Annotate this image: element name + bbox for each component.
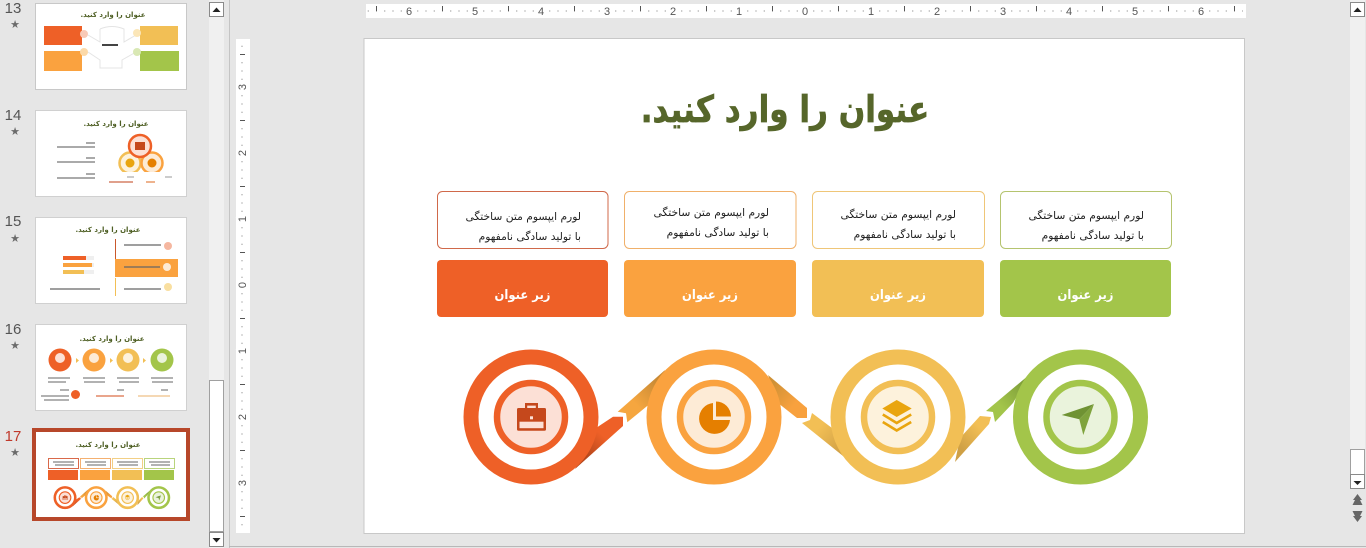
- left ruler: 1: [237, 348, 249, 354]
- top ruler: 4: [1066, 6, 1072, 18]
- thumbnail: slide 16: عنوان را وارد کنید.: [79, 335, 145, 343]
- top ruler: [366, 4, 1246, 18]
- text box 1: لورم ایپسوم متن ساختگی: [465, 210, 581, 223]
- thumbnail: slide 16: ★: [10, 339, 20, 352]
- top ruler: 1: [736, 6, 742, 18]
- arrow: green incoming ribbon: [986, 375, 1029, 422]
- right scrollbar: [1350, 0, 1365, 522]
- text box 1: با تولید سادگی نامفهوم: [479, 230, 581, 243]
- column 1: red: [437, 192, 608, 317]
- arrow: yellow incoming ribbon: [802, 413, 848, 460]
- text box 3: لورم ایپسوم متن ساختگی: [840, 208, 956, 221]
- subheading block 1: زیر عنوان: [495, 287, 550, 302]
- text box 2: لورم ایپسوم متن ساختگی: [653, 206, 769, 219]
- thumbnail: slide 17 (selected): [5, 428, 188, 519]
- arrow: yellow to green ribbon: [955, 416, 991, 462]
- subheading block 1: [437, 260, 608, 317]
- icon: send arrow: [1062, 404, 1094, 435]
- left ruler: 2: [237, 414, 249, 420]
- subheading block 2: زیر عنوان: [682, 287, 738, 302]
- ring: green: [1020, 357, 1140, 477]
- thumbnail: slide 15: عنوان را وارد کنید.: [75, 226, 141, 234]
- subheading block 4: زیر عنوان: [1058, 287, 1113, 302]
- thumbnail: slide 13: [5, 0, 186, 90]
- thumbnail: slide 16: [5, 321, 186, 410]
- arrow: orange incoming ribbon: [618, 370, 665, 422]
- thumbnail: slide 17 (selected): ★: [10, 446, 20, 459]
- top ruler: 3: [1000, 6, 1006, 18]
- top ruler: 4: [538, 6, 544, 18]
- thumbnail: slide 17 (selected): عنوان را وارد کنید.: [75, 441, 141, 449]
- text box 3: با تولید سادگی نامفهوم: [854, 228, 956, 241]
- thumbnail: slide 16: 16: [5, 321, 21, 338]
- thumbnail: slide 15: ★: [10, 232, 20, 245]
- top ruler: 5: [472, 6, 478, 18]
- text box 1: [438, 192, 608, 248]
- subheading block 3: [812, 260, 984, 317]
- icon: layers: [882, 400, 912, 430]
- left ruler: 3: [237, 480, 249, 486]
- top ruler: 2: [670, 6, 676, 18]
- thumbnail: slide 14: [5, 107, 186, 196]
- thumbnail: slide 15: [5, 213, 186, 304]
- icon: briefcase: [517, 403, 546, 431]
- slide canvas: [364, 38, 1244, 534]
- ribbon and ring diagram: [471, 357, 1140, 477]
- text box 3: [812, 192, 984, 248]
- column 2: orange: [624, 192, 796, 317]
- icon: pie chart: [699, 402, 731, 434]
- text box 4: [1000, 192, 1172, 248]
- text box 2: با تولید سادگی نامفهوم: [667, 226, 769, 239]
- thumbnail: slide 13: 13: [5, 0, 21, 17]
- thumbnail: slide 17 (selected): 17: [5, 428, 21, 445]
- arrow: red to orange ribbon: [575, 417, 623, 469]
- thumbnail: slide 14: 14: [5, 107, 21, 124]
- ring: yellow: [838, 357, 958, 477]
- thumbnail: slide 14: عنوان را وارد کنید.: [83, 120, 149, 128]
- left ruler: 3: [237, 84, 249, 90]
- subheading block 4: [1000, 260, 1171, 317]
- arrow: orange to yellow ribbon: [768, 375, 807, 418]
- top ruler: 5: [1132, 6, 1138, 18]
- thumbnail: slide 15: 15: [5, 213, 21, 230]
- thumbnail pane scrollbar: [209, 0, 224, 548]
- subheading block 2: [624, 260, 796, 317]
- text box 4: با تولید سادگی نامفهوم: [1042, 229, 1144, 242]
- ring: orange: [654, 357, 774, 477]
- top ruler: 1: [868, 6, 874, 18]
- left ruler: 1: [237, 216, 249, 222]
- text box 2: [624, 192, 796, 248]
- column 3: yellow: [812, 192, 984, 317]
- top ruler: 3: [604, 6, 610, 18]
- top ruler: 2: [934, 6, 940, 18]
- left ruler: 0: [237, 282, 249, 288]
- thumbnail: slide 14: ★: [10, 125, 20, 138]
- thumbnail: slide 13: عنوان را وارد کنید.: [80, 11, 146, 19]
- left ruler: [236, 39, 250, 533]
- text box 4: لورم ایپسوم متن ساختگی: [1028, 209, 1144, 222]
- top ruler: 0: [802, 6, 808, 18]
- thumbnail: slide 13: ★: [10, 18, 20, 31]
- title: عنوان را وارد کنید.: [641, 88, 929, 132]
- top ruler: 6: [1198, 6, 1204, 18]
- subheading block 3: زیر عنوان: [870, 287, 926, 302]
- left ruler: 2: [237, 150, 249, 156]
- ring: red: [471, 357, 591, 477]
- top ruler: 6: [406, 6, 412, 18]
- column 4: green: [1000, 192, 1172, 317]
